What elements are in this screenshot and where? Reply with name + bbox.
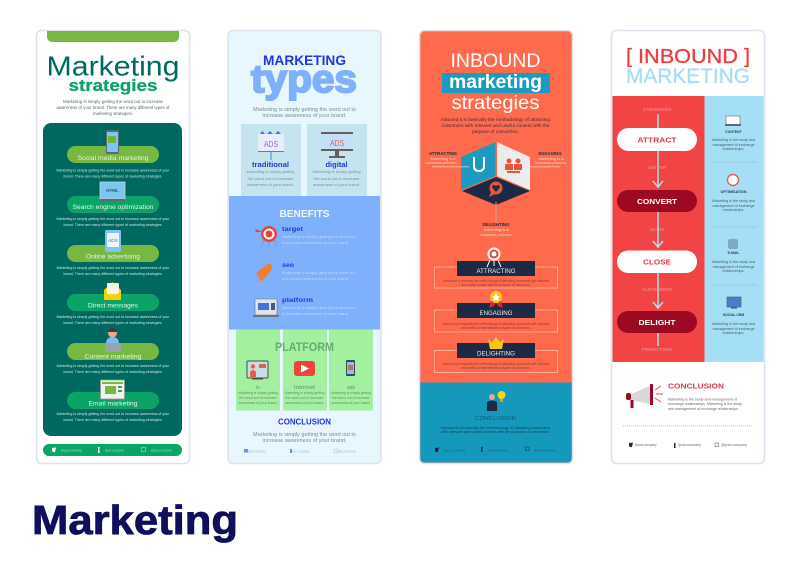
labels: CUSTOMERS — [642, 287, 672, 293]
item: search engine optimization: Marketing is simply getting the word out to increase awareness of your — [56, 216, 170, 221]
item: email marketing: Email marketing — [88, 400, 138, 408]
tactic: social crm: management of exchange — [712, 327, 755, 331]
footer: social — [629, 442, 747, 448]
platform: tv: the word out to increase — [239, 396, 277, 400]
tactic: e-mail — [712, 239, 755, 273]
step: attracting — [434, 248, 558, 288]
section: conclusion — [420, 382, 572, 462]
label: engaging — [530, 151, 567, 167]
benefit: target — [255, 226, 356, 247]
labels: STRANGERS — [642, 107, 672, 113]
tactic: content: management of exchange — [712, 143, 755, 147]
footer: social — [244, 449, 356, 454]
label: attracting — [426, 151, 469, 167]
item: social media marketing — [56, 130, 170, 178]
section: conclusion: CONCLUSION — [668, 382, 724, 390]
item: social media marketing: Marketing is simply getting the word out to increase awareness of your — [56, 168, 170, 172]
label: delighting — [480, 202, 512, 237]
platform: internet — [284, 361, 324, 405]
section: conclusion: Marketing is the study and management of — [668, 396, 738, 402]
label: attracting: ATTRACTING — [429, 151, 458, 156]
title: strategies: strategies — [452, 93, 540, 114]
top green bar — [47, 31, 179, 42]
icon: magnet — [473, 157, 485, 172]
column: blue tactics — [704, 96, 764, 362]
benefit: platform: platform — [282, 297, 313, 304]
tactic: content: relationships. — [722, 147, 745, 151]
heading: BENEFITS: BENEFITS — [280, 209, 330, 220]
step: delight — [617, 311, 697, 333]
tactic: optimisation: OPTIMISATION — [720, 190, 747, 194]
conclusion text — [253, 432, 356, 444]
step: close: CLOSE — [643, 258, 671, 266]
step: attracting: Inbound it is basically the methodology of attracting customers with relevant — [443, 279, 549, 283]
item: email marketing: brand. There are many different types of marketing strategies. — [64, 417, 162, 422]
tactic: content — [712, 116, 755, 151]
section: conclusion: with relevant and useful content with the purpose of convertion. — [441, 429, 550, 434]
footer: social: @your.company — [443, 448, 465, 452]
tactic: e-mail: management of exchange — [712, 265, 755, 269]
tactic: content: CONTENT — [725, 130, 743, 134]
footer: social: @your.company — [634, 443, 657, 447]
heading: CONCLUSION: CONCLUSION — [278, 418, 331, 426]
step: delighting: and useful content with the purpose of convertion. — [462, 366, 531, 370]
card: traditional — [241, 124, 301, 196]
diagram: hexagon — [461, 142, 530, 205]
platform: ads — [331, 360, 371, 405]
title: marketing band: marketing — [449, 72, 542, 93]
footer: social: @your.company — [248, 450, 266, 454]
panel: marketing types — [228, 30, 381, 464]
step: attracting: and useful content with the purpose of convertion. — [462, 283, 531, 287]
footer: social: @your.company — [721, 443, 747, 447]
tactic: content: Marketing is the study and — [712, 138, 755, 142]
step: delight: DELIGHT — [638, 318, 676, 327]
footer: social: /your.company — [678, 443, 701, 447]
title: INBOUND: INBOUND — [450, 51, 540, 72]
platform: ads: Marketing is simply getting — [331, 391, 371, 395]
label: delighting: Marketing is a — [484, 228, 509, 232]
item: content marketing: Content marketing — [84, 354, 142, 360]
section: conclusion: CONCLUSION — [475, 416, 516, 422]
label: delighting: DELIGHTING — [482, 222, 510, 227]
icon: heart speech bubble — [489, 182, 502, 197]
card: traditional: Marketing is simply getting — [246, 169, 294, 174]
platform: tv: tv — [256, 385, 260, 391]
footer: social bar: @your.company — [151, 448, 172, 452]
section: conclusion — [623, 382, 752, 448]
item: search engine optimization: HTML — [106, 188, 119, 193]
item: online advertising: brand. There are many different types of marketing strategies. — [64, 271, 162, 276]
tactic: optimisation — [712, 174, 755, 212]
benefit: target: target — [282, 226, 304, 233]
section: platform columns — [236, 330, 373, 410]
step: delighting: Inbound it is basically the methodology of attracting customers with relevant — [443, 362, 549, 366]
step: close — [617, 250, 697, 273]
step: delighting: DELIGHTING — [477, 352, 515, 358]
card: digital — [307, 124, 367, 196]
tactic: social crm: relationships. — [722, 331, 745, 335]
benefit: platform — [253, 297, 356, 317]
item: social media marketing: Social media marketing — [78, 155, 149, 162]
platform: ads: awareness of your brand. — [332, 401, 370, 405]
footer: social — [435, 447, 556, 452]
title: MARKETING: MARKETING — [263, 52, 346, 68]
icon: megaphone — [626, 384, 663, 408]
item: direct messages — [56, 282, 170, 325]
panel: inbound marketing funnel — [612, 30, 764, 464]
tactic: social crm — [712, 297, 755, 335]
item: online advertising — [56, 230, 170, 276]
item: email marketing — [56, 380, 170, 422]
footer: social bar — [43, 444, 182, 456]
title: MARKETING: MARKETING — [626, 65, 750, 88]
benefit: seo: to increase awareness of your brand. — [282, 277, 349, 281]
footer: social: @your.company — [534, 448, 556, 452]
intro text: awareness of your brand. There are many different types of — [56, 105, 170, 110]
benefit: seo: Marketing is simply getting the word out — [282, 271, 356, 275]
labels: VISITOR — [648, 165, 667, 171]
footer: social bar: @your.company — [61, 448, 82, 452]
intro text: marketing strategies. — [93, 111, 133, 116]
section: conclusion: Inbound it is basically the methodology of attracting customers — [441, 425, 550, 430]
tactic: e-mail: Marketing is the study and — [712, 260, 755, 264]
intro text — [441, 117, 550, 134]
platform: ads: ads — [347, 385, 356, 391]
platform: tv: Marketing is simply getting — [238, 391, 278, 395]
main caption: Marketing: Marketing — [32, 497, 238, 543]
platform: internet: Marketing is simply getting — [284, 391, 324, 395]
intro text: customers with relevant and useful content with the — [442, 123, 550, 128]
labels: LEADS — [650, 227, 664, 233]
item: online advertising: Online advertising — [86, 254, 140, 260]
item: content marketing: Marketing is simply getting the word out to increase awareness of your — [56, 363, 170, 368]
platform: internet: the word out to increase — [286, 396, 324, 400]
intro text: purpose of convertion. — [472, 129, 519, 134]
item: online advertising: Marketing is simply getting the word out to increase awareness of your — [56, 265, 170, 270]
labels: PROMOTERS — [642, 347, 672, 353]
intro text: Marketing is simply getting the word out to — [253, 107, 356, 113]
footer: social: /your.company — [292, 450, 309, 454]
step: engaging: Inbound it is basically the methodology of attracting customers with relevant — [443, 322, 549, 326]
dark green panel — [43, 123, 182, 436]
card: traditional: ADS — [264, 139, 278, 149]
step: delighting — [434, 337, 558, 372]
card: traditional: the word out to increase — [248, 176, 294, 181]
heading: PLATFORM: PLATFORM — [275, 340, 334, 354]
conclusion text: increase awareness of your brand. — [262, 438, 346, 444]
card: digital: Marketing is simply getting — [312, 169, 360, 174]
item: search engine optimization — [56, 182, 170, 227]
benefit: seo: seo — [282, 262, 294, 269]
footer: social: @your.company — [338, 450, 356, 454]
benefit: target: to increase awareness of your brand. — [282, 241, 349, 245]
label: engaging: Marketing is a — [538, 157, 564, 161]
footer: social: /your.company — [488, 448, 508, 452]
subtitle: strategies: strategies — [68, 76, 158, 95]
intro text: Marketing is simply getting the word out to increase — [63, 99, 163, 104]
tactic: optimisation: management of exchange — [712, 204, 755, 208]
title: Marketing: Marketing — [46, 50, 180, 82]
title: [ INBOUND ]: [ INBOUND ] — [626, 46, 750, 68]
item: content marketing — [56, 328, 170, 374]
intro text — [253, 107, 356, 119]
step: engaging — [434, 291, 558, 332]
band: benefits — [229, 196, 380, 330]
step: attract: ATTRACT — [638, 136, 677, 144]
intro text: increase awareness of your brand. — [262, 113, 346, 119]
card: traditional: traditional — [252, 162, 289, 169]
label: engaging: ENGAGING — [538, 151, 562, 156]
tactic: optimisation: relationships. — [722, 208, 745, 212]
item: direct messages: brand. There are many different types of marketing strategies. — [64, 320, 162, 325]
step: engaging: ENGAGING — [480, 311, 513, 317]
icon: people — [505, 158, 522, 173]
step: attracting: ATTRACTING — [476, 269, 516, 275]
item: online advertising: ADS — [108, 238, 118, 244]
benefit: platform: to increase awareness of your brand. — [282, 312, 349, 316]
platform: tv — [238, 361, 278, 405]
panel: inbound marketing strategies — [420, 30, 572, 464]
platform: internet: awareness of your brand. — [285, 401, 324, 405]
benefit: seo — [256, 262, 356, 282]
item: search engine optimization: Search engine optimization — [72, 204, 154, 211]
benefit: platform: Marketing is simply getting the word out — [282, 306, 356, 310]
platform: internet: Internet — [294, 385, 316, 391]
intro text: Inbound it is basically the methodology of attracting — [441, 117, 550, 122]
card: digital: ADS — [330, 138, 344, 148]
tactic: optimisation: Marketing is the study and — [712, 199, 755, 203]
labels — [642, 107, 672, 353]
platform: tv: awareness of your brand. — [238, 401, 278, 405]
item: direct messages: Marketing is simply getting the word out to increase awareness of your — [56, 314, 170, 319]
icon: person with light bulb — [487, 391, 506, 411]
card: digital: awareness of your brand. — [313, 182, 360, 187]
card: digital: the word out to increase — [314, 176, 360, 181]
item: search engine optimization: brand. There are many different types of marketing strategies. — [64, 222, 162, 227]
title: types: types — [251, 58, 357, 101]
tactic: social crm: SOCIAL CRM — [723, 313, 744, 317]
label: engaging: business process — [536, 161, 567, 165]
step: attract — [617, 128, 697, 151]
step: convert — [617, 190, 697, 212]
step: convert: CONVERT — [637, 197, 677, 206]
card: digital: digital — [326, 162, 348, 169]
intro text — [56, 99, 170, 116]
arrows — [653, 114, 663, 346]
label: attracting: business process — [426, 161, 457, 165]
label: attracting: Marketing is a — [430, 157, 456, 161]
label: delighting: business process — [480, 233, 512, 237]
section: conclusion: exchange relationships. Marketing is the study — [668, 401, 742, 406]
section: conclusion: and management of exchange relationships. — [668, 406, 739, 411]
platform: ads: the word out to increase — [332, 396, 370, 400]
column: red funnel — [612, 96, 704, 362]
conclusion text: Marketing is simply getting the word out to — [253, 432, 356, 438]
panel: marketing strategies — [36, 30, 190, 464]
benefit: target: Marketing is simply getting the word out — [282, 235, 356, 239]
tactic: social crm: Marketing is the study and — [712, 322, 755, 326]
item: email marketing: Marketing is simply getting the word out to increase awareness of your — [56, 411, 170, 416]
footer: social bar: /your.company — [105, 448, 124, 452]
card: traditional: awareness of your brand. — [247, 182, 294, 187]
item: social media marketing: brand. There are many different types of marketing strategies. — [64, 174, 162, 178]
tactic: e-mail: E-MAIL — [728, 251, 739, 255]
item: direct messages: Direct messages — [88, 302, 139, 310]
tactic: e-mail: relationships. — [722, 269, 745, 273]
item: content marketing: brand. There are many different types of marketing strategies. — [64, 369, 162, 374]
step: engaging: and useful content with the purpose of convertion. — [462, 326, 531, 330]
